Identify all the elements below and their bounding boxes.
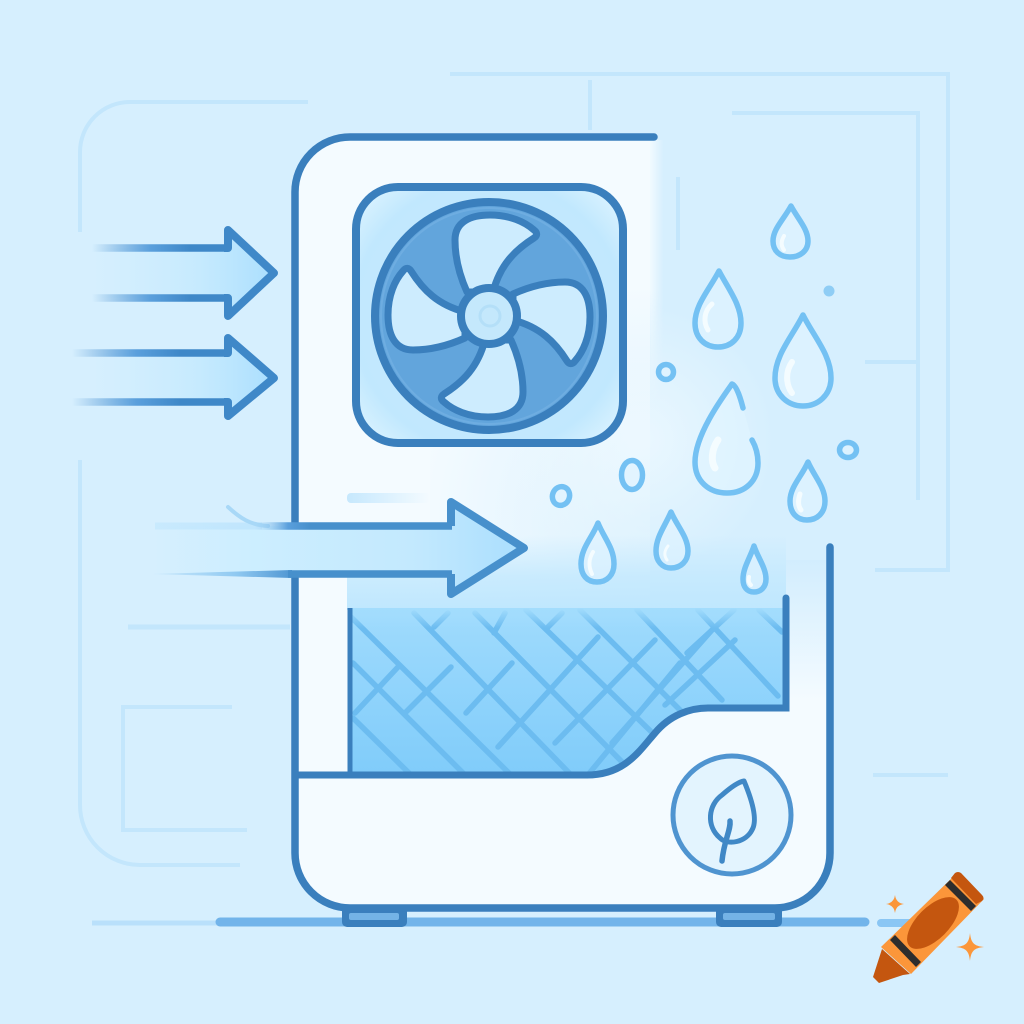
crayon logo: [873, 872, 984, 983]
droplet 1: [773, 206, 808, 257]
water tank with mesh filter: [298, 598, 786, 780]
ground shadow: [220, 922, 912, 923]
droplet 5: [790, 462, 825, 520]
crayon tip: [873, 949, 910, 983]
intake arrow lower: [72, 337, 275, 417]
droplet 7: [656, 512, 688, 568]
droplet 8: [743, 546, 766, 592]
machine body outline: [295, 137, 830, 908]
sparkles: [886, 895, 904, 913]
illustration: dehumidifier: [76, 72, 984, 983]
machine feet: [342, 904, 782, 927]
short highlight dash: [347, 493, 430, 503]
fan blades: [388, 215, 590, 417]
machine body fill: [295, 137, 830, 908]
fan hub: [461, 288, 517, 344]
tank walls: [348, 608, 352, 775]
water droplets: [550, 206, 856, 592]
eco leaf badge: [673, 756, 791, 874]
big airflow arrow: [152, 502, 524, 594]
droplet highlights: [590, 236, 801, 585]
droplet 3: [775, 315, 831, 406]
intake arrow upper: [92, 228, 275, 318]
droplet 2: [695, 271, 741, 347]
droplet 6: [581, 523, 614, 582]
background blueprint lines: [80, 74, 948, 923]
small dot droplet: [824, 286, 834, 296]
crayon body: [881, 873, 984, 974]
fan unit: [356, 187, 623, 443]
droplet 4 open: [695, 384, 758, 493]
